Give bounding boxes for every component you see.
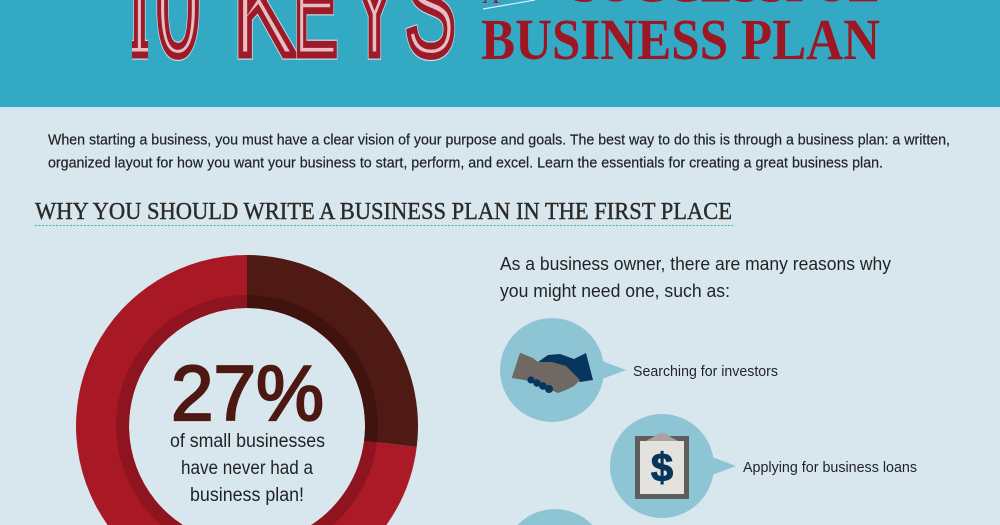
donut value: 27%: 27% [171,349,324,437]
navy fingers [527,376,553,393]
icon: clipboard bubble [610,414,736,518]
donut caption: of small businesses [170,431,325,452]
reasons lead-in text: As a business owner, there are many reasons why [500,253,892,274]
donut caption: have never had a [181,458,313,479]
title: 10 KEYS [132,0,456,62]
reasons lead-in text: you might need one, such as: [500,280,730,301]
donut: red segment right [311,441,417,525]
donut: red segment left [76,255,247,525]
icon: third reason bubble [518,509,592,525]
intro text: organized layout for how you want your business to start, perform, and excel. Learn the essentials for creating a great business plan. [48,156,883,172]
donut: inner shade right [311,441,377,525]
title: script A and underline [482,0,535,9]
intro text [48,132,950,172]
label: searching for investors: Searching for investors [633,364,778,380]
donut: inner shade dark [247,295,378,442]
icon: handshake bubble [500,318,626,422]
navy hand [538,353,593,382]
icon: clipboard bubble: $ [651,446,673,490]
panel: header banner [0,0,1000,109]
reasons lead-in text [500,253,892,301]
title: BUSINESS PLAN: BUSINESS PLAN [481,7,880,72]
gray hand [512,353,580,393]
label: applying for business loans: Applying for business loans [743,460,917,476]
donut: inner shade left [116,295,247,525]
donut caption: business plan! [190,485,304,506]
intro text: When starting a business, you must have a clear vision of your purpose and goals. The best way to do this is through a business plan: a written, [48,132,950,148]
donut caption [170,431,325,506]
section heading: WHY YOU SHOULD WRITE A BUSINESS PLAN IN THE FIRST PLACE [35,199,732,225]
donut chart: 27% [76,255,418,525]
donut: dark segment [247,255,418,447]
